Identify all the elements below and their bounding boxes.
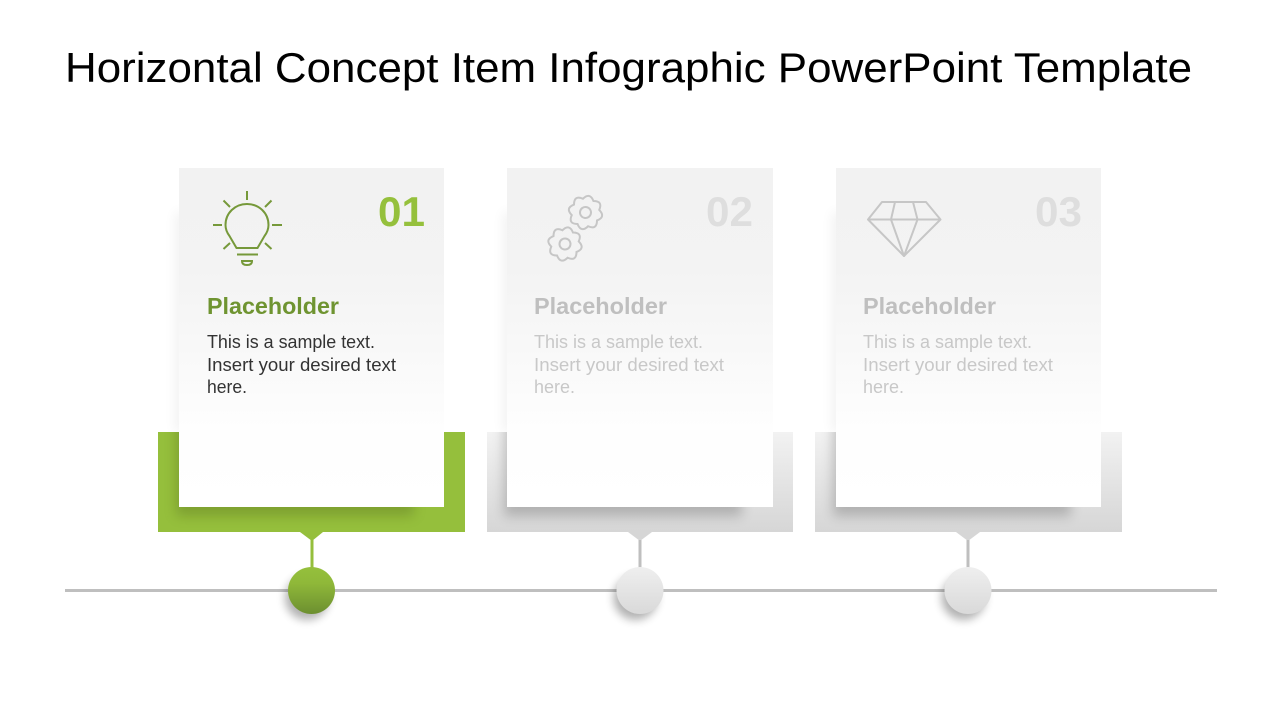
faint outer shadow: [503, 212, 603, 432]
card shadow: [498, 432, 747, 521]
connector: green: [310, 540, 314, 568]
card: [836, 168, 1101, 507]
pointer: green: [300, 532, 323, 541]
frame: green: [158, 432, 465, 532]
timeline line: [65, 589, 1217, 592]
body text: This is a sample text.: [534, 332, 703, 352]
heading: Placeholder: [534, 293, 667, 319]
heading: Placeholder: [207, 293, 339, 319]
frame: gray: [487, 432, 793, 532]
number 01: 01: [378, 188, 425, 235]
frame: gray: [815, 432, 1122, 532]
node: [288, 567, 335, 614]
pointer: gray: [956, 532, 980, 541]
body text: Insert your desired text: [534, 355, 724, 375]
panel: item 02: [487, 168, 793, 620]
body text: This is a sample text.: [863, 332, 1032, 352]
panel: item 03: [815, 168, 1122, 620]
icon: gears: [545, 192, 606, 264]
body text: Insert your desired text: [207, 355, 396, 375]
number 02: 02: [706, 188, 753, 235]
pointer: gray: [628, 532, 652, 541]
body text: [534, 332, 724, 397]
connector: gray: [966, 540, 970, 568]
icon: diamond: [868, 202, 940, 256]
node: [944, 567, 992, 614]
faint outer shadow: [832, 212, 932, 432]
body text: [863, 332, 1053, 397]
heading: Placeholder: [863, 293, 996, 319]
panel: item 01: [158, 168, 465, 620]
body text: [207, 332, 396, 397]
body text: here.: [207, 377, 247, 397]
title: Horizontal Concept Item Infographic PowerPoint Template: [65, 44, 1192, 91]
node shadow: [942, 576, 986, 620]
body text: here.: [863, 377, 904, 397]
faint outer shadow: [175, 212, 275, 432]
card: [507, 168, 773, 507]
node shadow: [285, 576, 329, 620]
card shadow: [828, 432, 1076, 521]
node: [616, 567, 664, 614]
node shadow: [614, 576, 658, 620]
body text: This is a sample text.: [207, 332, 375, 352]
card shadow: [172, 432, 417, 520]
connector: gray: [638, 540, 642, 568]
card: [179, 168, 444, 507]
icon: light bulb: [213, 191, 282, 265]
body text: here.: [534, 377, 575, 397]
body text: Insert your desired text: [863, 355, 1053, 375]
number 03: 03: [1035, 188, 1082, 235]
